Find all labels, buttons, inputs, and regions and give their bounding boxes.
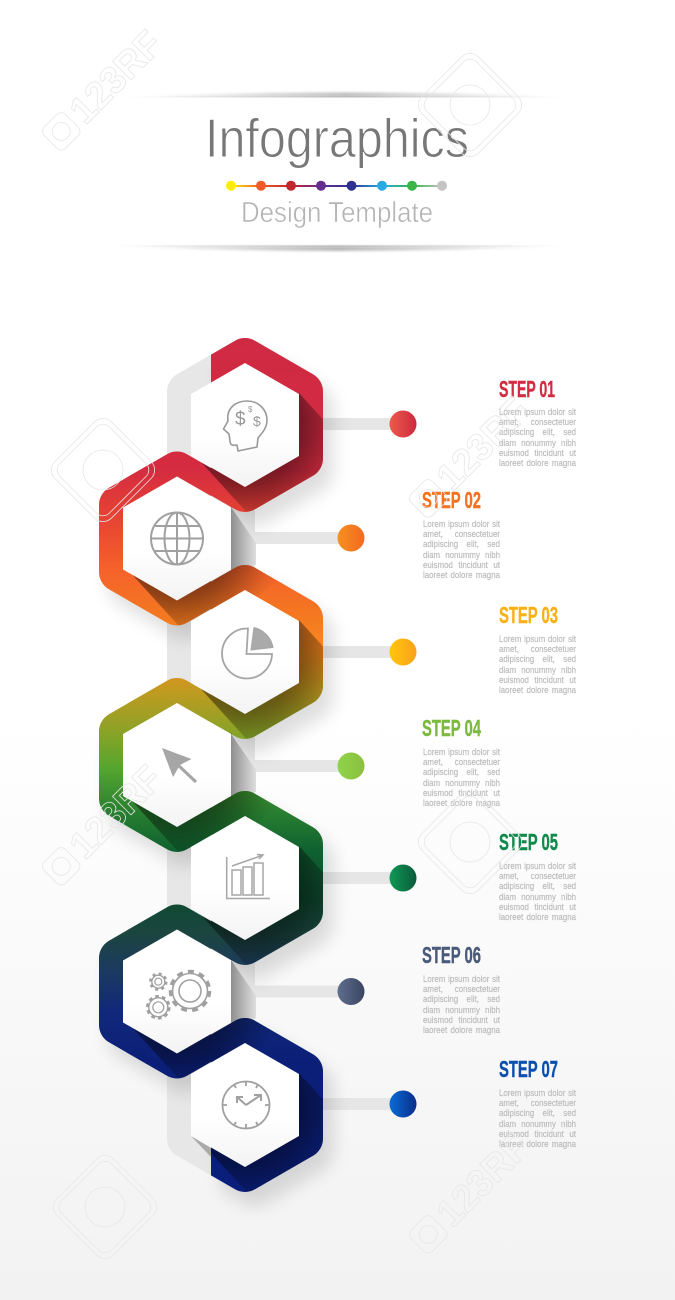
step headings: STEP 02 bbox=[422, 487, 481, 513]
subtitle: Design Template bbox=[241, 197, 433, 229]
text block: step 04: laoreet dolore magna bbox=[423, 798, 500, 808]
connector bars bbox=[250, 418, 392, 1110]
text block: step 02: euismod tincidunt ut bbox=[423, 560, 500, 570]
text block: step 03: amet, consectetuer bbox=[499, 644, 576, 654]
icon: gears bbox=[147, 972, 210, 1018]
text block: step 07 bbox=[499, 1088, 576, 1150]
text block: step 01 bbox=[499, 407, 576, 468]
icon: head with dollars: $ bbox=[235, 409, 246, 430]
text block: step 02: amet, consectetuer bbox=[423, 529, 500, 539]
text block: step 04: euismod tincidunt ut bbox=[423, 788, 500, 798]
main graphic: title and hexagon ribbon bbox=[99, 91, 558, 1210]
text block: step 06 bbox=[423, 974, 500, 1036]
step headings bbox=[422, 376, 558, 1082]
step headings: STEP 01 bbox=[499, 376, 555, 402]
soft shadow of ribbon bbox=[104, 380, 338, 1210]
text block: step 07: Lorem ipsum dolor sit bbox=[499, 1088, 576, 1098]
header rule: bottom bbox=[110, 246, 565, 251]
text block: step 02: adipiscing elit, sed bbox=[423, 539, 500, 549]
text block: step 05: Lorem ipsum dolor sit bbox=[499, 861, 576, 871]
step headings: STEP 03 bbox=[499, 602, 558, 628]
icon: clock bbox=[222, 1082, 270, 1128]
text block: step 05 bbox=[499, 861, 576, 922]
spine shadows beside left hexagons bbox=[231, 507, 256, 1023]
text block: step 01: euismod tincidunt ut bbox=[499, 448, 576, 458]
text block: step 04: Lorem ipsum dolor sit bbox=[423, 747, 500, 757]
icon: cursor arrow bbox=[162, 748, 196, 782]
text block: step 04: adipiscing elit, sed bbox=[423, 767, 500, 777]
header rule: top bbox=[125, 92, 565, 100]
text block: step 06: laoreet dolore magna bbox=[423, 1025, 500, 1035]
text block: step 03: diam nonummy nibh bbox=[499, 665, 576, 675]
text block: step 06: diam nonummy nibh bbox=[423, 1005, 500, 1015]
colour ribbon bbox=[90, 330, 330, 1200]
text block: step 05: amet, consectetuer bbox=[499, 871, 576, 881]
text block: step 04: diam nonummy nibh bbox=[423, 778, 500, 788]
text block: step 05: diam nonummy nibh bbox=[499, 892, 576, 902]
text block: step 03 bbox=[499, 634, 576, 696]
icon: head with dollars: $ bbox=[253, 413, 261, 429]
text block: step 01: Lorem ipsum dolor sit bbox=[499, 407, 576, 417]
text block: step 01: laoreet dolore magna bbox=[499, 458, 576, 468]
shadow at the tail of the spine bbox=[191, 1136, 211, 1157]
text block: step 07: diam nonummy nibh bbox=[499, 1119, 576, 1129]
step dots bbox=[338, 410, 416, 1118]
text block: step 06: adipiscing elit, sed bbox=[423, 994, 500, 1004]
text block: step 07: euismod tincidunt ut bbox=[499, 1129, 576, 1139]
text block: step 03: adipiscing elit, sed bbox=[499, 654, 576, 664]
icon: head with dollars bbox=[224, 401, 267, 451]
text block: step 01: adipiscing elit, sed bbox=[499, 427, 576, 437]
text block: step 02: Lorem ipsum dolor sit bbox=[423, 519, 500, 529]
icon: bar chart with arrow bbox=[227, 854, 270, 898]
colour dot line bbox=[226, 181, 447, 191]
text block: step 04 bbox=[423, 747, 500, 808]
text block: step 02 bbox=[423, 519, 500, 580]
text block: step 05: laoreet dolore magna bbox=[499, 912, 576, 922]
text block: step 02: diam nonummy nibh bbox=[423, 550, 500, 560]
ribbon fold shadows bbox=[133, 393, 323, 1192]
text block: step 04: amet, consectetuer bbox=[423, 757, 500, 767]
text block: step 02: laoreet dolore magna bbox=[423, 570, 500, 580]
text block: step 06: euismod tincidunt ut bbox=[423, 1015, 500, 1025]
text block: step 05: adipiscing elit, sed bbox=[499, 881, 576, 891]
icon: head with dollars: $ bbox=[248, 405, 253, 414]
text block: step 07: amet, consectetuer bbox=[499, 1098, 576, 1108]
grey spine behind hexagons bbox=[99, 338, 323, 1192]
text block: step 03: laoreet dolore magna bbox=[499, 685, 576, 695]
icon: pie chart bbox=[222, 628, 273, 678]
text block: step 03: Lorem ipsum dolor sit bbox=[499, 634, 576, 644]
step headings: STEP 05 bbox=[499, 829, 558, 855]
text block: step 06: amet, consectetuer bbox=[423, 984, 500, 994]
text block: step 01: amet, consectetuer bbox=[499, 417, 576, 427]
text block: step 05: euismod tincidunt ut bbox=[499, 902, 576, 912]
white hexagon faces bbox=[123, 363, 299, 1167]
text block: step 07: adipiscing elit, sed bbox=[499, 1108, 576, 1118]
text block: step 01: diam nonummy nibh bbox=[499, 438, 576, 448]
step headings: STEP 06 bbox=[422, 942, 481, 968]
text block: step 06: Lorem ipsum dolor sit bbox=[423, 974, 500, 984]
step headings: STEP 07 bbox=[499, 1056, 558, 1082]
title: Infographics bbox=[205, 107, 469, 169]
icon: globe bbox=[151, 512, 203, 564]
step headings: STEP 04 bbox=[422, 715, 481, 741]
text block: step 03: euismod tincidunt ut bbox=[499, 675, 576, 685]
text block: step 07: laoreet dolore magna bbox=[499, 1139, 576, 1149]
